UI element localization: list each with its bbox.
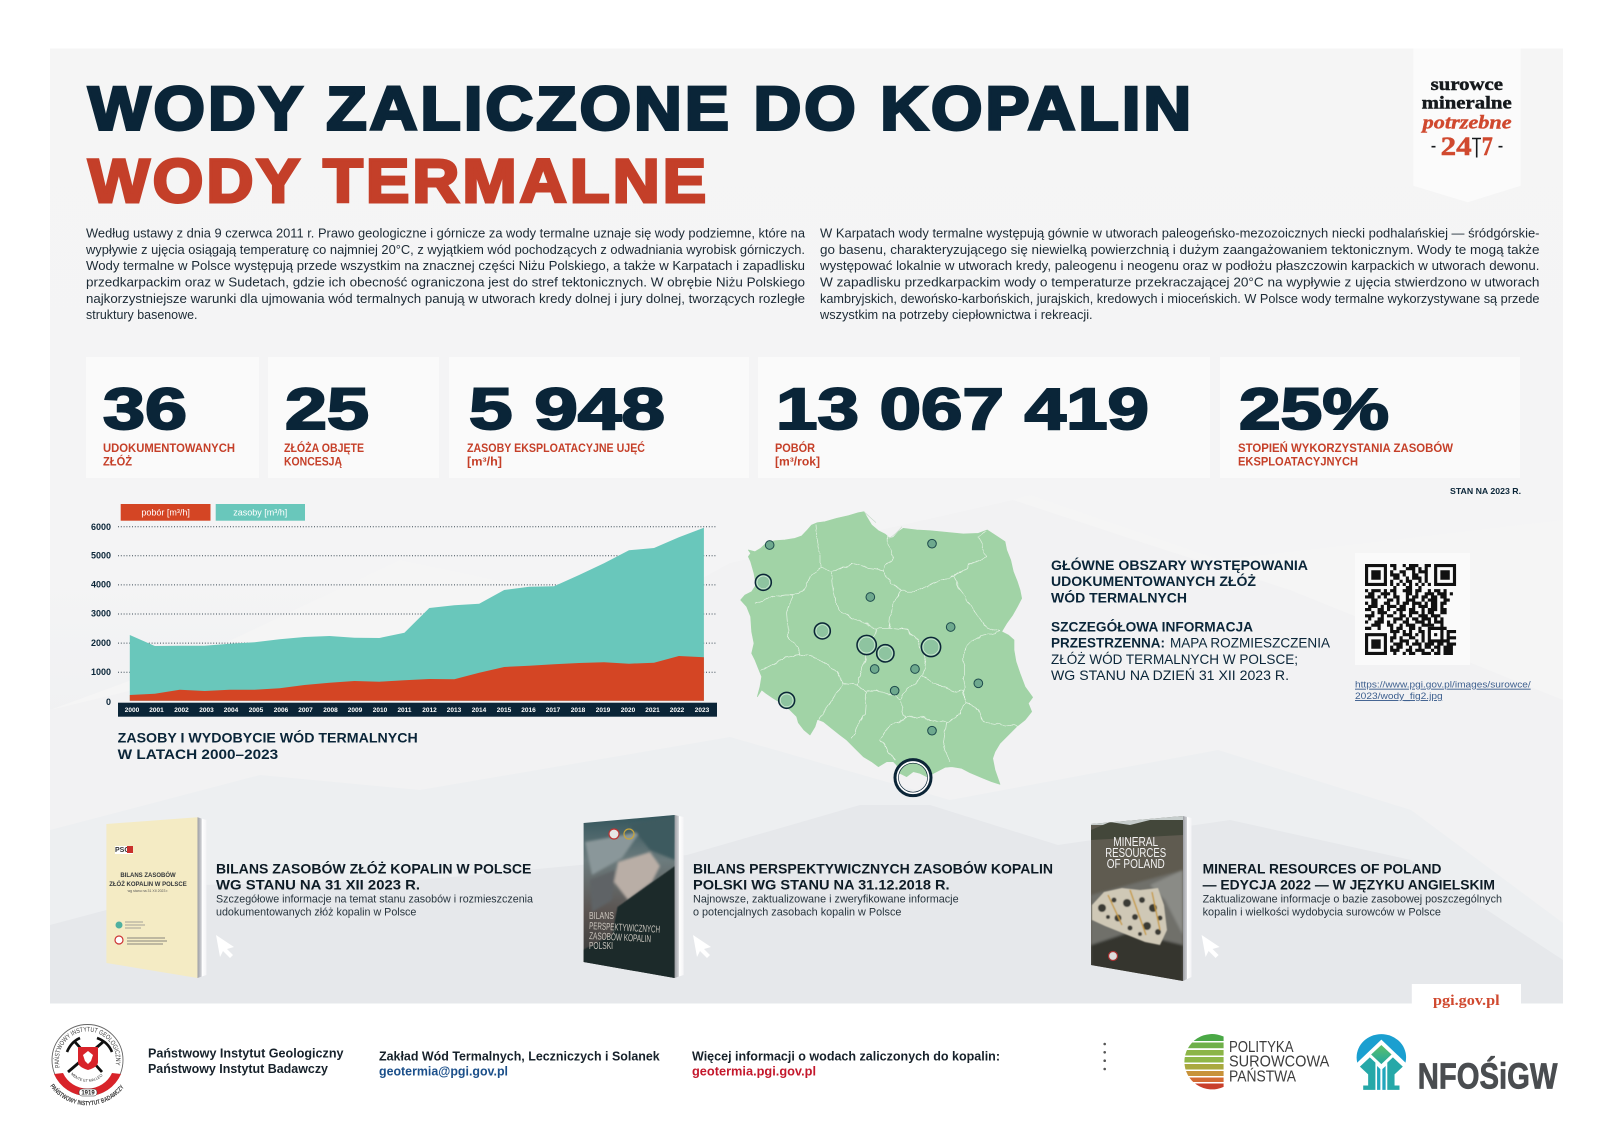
stat card: 25% bbox=[1220, 357, 1520, 478]
map description text: PRZESTRZENNA: bbox=[1051, 635, 1165, 651]
book 3 description: MINERAL RESOURCES OF POLAND bbox=[1203, 860, 1442, 876]
area chart: reserves and extraction 2000–2023: 2012 bbox=[422, 707, 437, 714]
book cover: Bilans perspektywicznych zasobów: POLSKI bbox=[589, 941, 613, 952]
chart title: W LATACH 2000–2023 bbox=[118, 746, 278, 762]
map of Poland with deposit areas bbox=[741, 512, 1033, 796]
area chart: reserves and extraction 2000–2023: 3000 bbox=[91, 608, 111, 618]
book cover: Mineral Resources of Poland: MINERAL bbox=[1113, 834, 1158, 849]
chart title: ZASOBY I WYDOBYCIE WÓD TERMALNYCH bbox=[118, 729, 418, 746]
book cover: Mineral Resources of Poland bbox=[1091, 814, 1192, 985]
stat card: 5 948 bbox=[449, 357, 749, 478]
area chart: reserves and extraction 2000–2023: 2015 bbox=[497, 707, 512, 714]
footer: more information: Więcej informacji o wodach zaliczonych do kopalin: bbox=[692, 1050, 1000, 1064]
area chart: reserves and extraction 2000–2023: 2010 bbox=[373, 707, 388, 714]
badge: surowce mineralne potrzebne 24/7: surowce bbox=[1431, 74, 1503, 94]
stat card: 13 067 419: 13 067 419 bbox=[776, 377, 1149, 442]
title: WODY ZALICZONE DO KOPALIN bbox=[88, 74, 1194, 142]
logo: NFOŚiGW: NFOŚiGW bbox=[1418, 1054, 1557, 1096]
QR link bbox=[1355, 680, 1531, 702]
area chart: reserves and extraction 2000–2023: 5000 bbox=[91, 550, 111, 560]
stat card: 36: 36 bbox=[103, 377, 187, 442]
logo: PGI seal: PAŃSTWOWY INSTYTUT BADAWCZY bbox=[50, 1084, 124, 1106]
badge: surowce mineralne potrzebne 24/7: mineralne bbox=[1422, 92, 1512, 112]
area chart: reserves and extraction 2000–2023: 2009 bbox=[348, 707, 363, 714]
badge: surowce mineralne potrzebne 24/7: 7 bbox=[1482, 132, 1493, 161]
book cover: Bilans perspektywicznych zasobów: BILANS bbox=[589, 911, 614, 922]
area chart: reserves and extraction 2000–2023: 2006 bbox=[274, 707, 289, 714]
area chart: reserves and extraction 2000–2023: 2021 bbox=[645, 707, 660, 714]
QR code bbox=[1355, 553, 1470, 665]
book cover: Bilans perspektywicznych zasobów bbox=[583, 815, 684, 980]
text block: left column: struktury basenowe. bbox=[86, 308, 198, 322]
stat card: 13 067 419: [m³/rok] bbox=[775, 456, 820, 468]
book cover: Bilans zasobów: PSG bbox=[115, 847, 130, 854]
book 1 description: BILANS ZASOBÓW ZŁÓŻ KOPALIN W POLSCE bbox=[216, 859, 531, 876]
area chart: reserves and extraction 2000–2023: 2005 bbox=[249, 707, 264, 714]
badge: surowce mineralne potrzebne 24/7: potrzebne bbox=[1420, 112, 1512, 133]
book 3 description bbox=[1203, 860, 1502, 918]
area chart: reserves and extraction 2000–2023: 4000 bbox=[91, 580, 111, 590]
book 1 description: Szczegółowe informacje na temat stanu zasobów i rozmieszczenia bbox=[216, 894, 534, 906]
map description text: GŁÓWNE OBSZARY WYSTĘPOWANIA bbox=[1051, 556, 1308, 573]
book cover: Mineral Resources of Poland: RESOURCES bbox=[1105, 845, 1166, 860]
footer: institute name: Państwowy Instytut Badawczy bbox=[148, 1062, 328, 1076]
footer: institute name bbox=[148, 1047, 344, 1076]
footer: more information: geotermia.pgi.gov.pl bbox=[692, 1065, 816, 1079]
chart title bbox=[118, 729, 418, 762]
text block: left column: przedkarpackim oraz w Sudetach, gdzie ich obecność ograniczona jest do stref tektonicznych. W obrębie Niżu Polskiego bbox=[86, 276, 805, 290]
book cover: Bilans zasobów bbox=[106, 817, 206, 978]
map description text: ZŁÓŻ WÓD TERMALNYCH W POLSCE; bbox=[1051, 650, 1298, 667]
footer: department contact: Zakład Wód Termalnych, Leczniczych i Solanek bbox=[379, 1050, 660, 1064]
book cover: Bilans perspektywicznych zasobów: ZASOBÓW KOPALIN bbox=[589, 929, 651, 945]
map description text: SZCZEGÓŁOWA INFORMACJA bbox=[1051, 618, 1253, 635]
area chart: reserves and extraction 2000–2023: 2023 bbox=[695, 707, 710, 714]
footer dots bbox=[1103, 1043, 1106, 1070]
logo: PGI seal: 1919 bbox=[81, 1091, 95, 1097]
footer: institute name: Państwowy Instytut Geologiczny bbox=[148, 1047, 344, 1061]
area chart: reserves and extraction 2000–2023: 2008 bbox=[323, 707, 338, 714]
area chart: reserves and extraction 2000–2023: 0 bbox=[106, 697, 111, 707]
chart legend: pobór [m³/h] bbox=[141, 508, 190, 518]
book 2 description: POLSKI WG STANU NA 31.12.2018 R. bbox=[693, 876, 950, 892]
book cover: Bilans zasobów: BILANS ZASOBÓW bbox=[120, 871, 176, 879]
text block: left column: najkorzystniejsze warunki dla ujmowania wód termalnych panują w utworach kredy dolnej i jury dolnej, tworzących rozległe bbox=[86, 292, 805, 306]
book 2 description: Najnowsze, zaktualizowane i zweryfikowane informacje bbox=[693, 894, 959, 906]
stat card: 25%: 25% bbox=[1239, 377, 1389, 442]
title: WODY TERMALNE bbox=[88, 147, 709, 215]
chart legend: zasoby [m³/h] bbox=[233, 508, 287, 518]
map description text: WÓD TERMALNYCH bbox=[1051, 588, 1187, 605]
area chart: reserves and extraction 2000–2023: 2020 bbox=[621, 707, 636, 714]
stat card: 13 067 419: POBÓR bbox=[775, 442, 816, 455]
area chart: reserves and extraction 2000–2023: 2001 bbox=[149, 707, 164, 714]
map description text: WG STANU NA DZIEŃ 31 XII 2023 R. bbox=[1051, 667, 1289, 683]
logo: PGI seal bbox=[50, 1024, 124, 1106]
badge: surowce mineralne potrzebne 24/7 bbox=[1413, 48, 1521, 202]
book 1 description: udokumentowanych złóż kopalin w Polsce bbox=[216, 906, 416, 918]
area chart: reserves and extraction 2000–2023: 2017 bbox=[546, 707, 561, 714]
book 1 description: WG STANU NA 31 XII 2023 R. bbox=[216, 876, 420, 892]
map description text: UDOKUMENTOWANYCH ZŁÓŻ bbox=[1051, 572, 1256, 589]
logo: NFOŚiGW bbox=[1354, 1034, 1557, 1096]
text block: right column: wszystkim na potrzeby ciepłownictwa i rekreacji. bbox=[819, 308, 1093, 322]
logo: PGI seal: PAŃSTWOWY INSTYTUT GEOLOGICZNY bbox=[53, 1026, 121, 1068]
QR link: 2023/wody_fig2.jpg bbox=[1355, 691, 1443, 702]
badge: surowce mineralne potrzebne 24/7: 24 bbox=[1441, 132, 1472, 161]
map description text bbox=[1051, 556, 1331, 683]
title bbox=[88, 74, 1194, 215]
area chart: reserves and extraction 2000–2023: 2004 bbox=[224, 707, 239, 714]
QR link: https://www.pgi.gov.pl/images/surowce/ bbox=[1355, 680, 1531, 691]
book 3 description: Zaktualizowane informacje o bazie zasobowej poszczególnych bbox=[1203, 894, 1502, 906]
icon: cursor bbox=[693, 935, 711, 958]
text block: right column: W zapadlisku przedkarpackim wody o temperaturze przekraczającej 20°C na wypływie z ujęcia stwierdzono w utworach bbox=[820, 276, 1540, 290]
area chart: reserves and extraction 2000–2023: 2018 bbox=[571, 707, 586, 714]
text block: left column: Według ustawy z dnia 9 czerwca 2011 r. Prawo geologiczne i górnicze za wody termalne uznaje się wody podziemne, które na bbox=[86, 227, 805, 241]
stat card: 36: ZŁÓŻ bbox=[103, 456, 132, 468]
stat card: 5 948: 5 948 bbox=[469, 377, 665, 442]
stat card: 13 067 419 bbox=[758, 357, 1210, 478]
text block: right column: go basenu, charakteryzującego się niewielką powierzchnią i dużym zaangażowaniem tektonicznym. Wody te mogą także bbox=[820, 243, 1540, 257]
area chart: reserves and extraction 2000–2023 bbox=[91, 522, 717, 717]
book 2 description: BILANS PERSPEKTYWICZNYCH ZASOBÓW KOPALIN bbox=[693, 859, 1053, 876]
area chart: reserves and extraction 2000–2023: 2019 bbox=[596, 707, 611, 714]
footer: more information bbox=[692, 1050, 1000, 1079]
text block: right column bbox=[819, 227, 1540, 322]
stat card: 25 bbox=[268, 357, 439, 478]
book cover: Bilans zasobów: ZŁÓŻ KOPALIN W POLSCE bbox=[109, 880, 187, 888]
footer: department contact bbox=[379, 1050, 660, 1079]
logo: Polityka Surowcowa Państwa: POLITYKA bbox=[1229, 1039, 1294, 1056]
area chart: reserves and extraction 2000–2023: 2011 bbox=[397, 707, 412, 714]
area chart: reserves and extraction 2000–2023: 2016 bbox=[521, 707, 536, 714]
book 2 description bbox=[693, 859, 1053, 918]
book 3 description: kopalin i wielkości wydobycia surowców w Polsce bbox=[1203, 906, 1441, 918]
stat card: 5 948: ZASOBY EKSPLOATACYJNE UJĘĆ bbox=[467, 442, 645, 455]
text block: left column: Wody termalne w Polsce występują przede wszystkim na znacznej części Niżu Polskiego, a także w Karpatach i zapadlisku bbox=[86, 259, 805, 273]
website tab bbox=[1412, 984, 1521, 1009]
book 1 description bbox=[216, 859, 534, 918]
book cover: Mineral Resources of Poland: OF POLAND bbox=[1107, 856, 1165, 871]
stat card: 36: UDOKUMENTOWANYCH bbox=[103, 443, 235, 455]
text block: left column bbox=[85, 227, 805, 322]
icon: cursor bbox=[216, 935, 234, 958]
stat card: 5 948: [m³/h] bbox=[467, 456, 502, 468]
logo: PGI seal: MENTE ET MALLEO bbox=[71, 1072, 102, 1082]
chart legend bbox=[121, 504, 305, 521]
area chart: reserves and extraction 2000–2023: 1000 bbox=[91, 667, 111, 677]
area chart: reserves and extraction 2000–2023: 2022 bbox=[670, 707, 685, 714]
website tab: pgi.gov.pl bbox=[1433, 993, 1500, 1009]
stat card: 25: KONCESJĄ bbox=[284, 456, 342, 468]
stat card: 25%: STOPIEŃ WYKORZYSTANIA ZASOBÓW bbox=[1238, 442, 1453, 455]
stat card: 25: 25 bbox=[285, 377, 369, 442]
footer: department contact: geotermia@pgi.gov.pl bbox=[379, 1065, 508, 1079]
text block: right column: kambryjskich, dewońsko-karbońskich, jurajskich, kredowych i mioceńskich. W Polsce wody termalne wykorzystywane są przede bbox=[820, 292, 1540, 306]
book cover: Bilans zasobów: wg stanu na 31 XII 2023 r. bbox=[128, 889, 168, 893]
area chart: reserves and extraction 2000–2023: 2003 bbox=[199, 707, 214, 714]
stat card: 36 bbox=[86, 357, 259, 478]
text block: right column: występować lokalnie w utworach kredy, paleogenu i neogenu oraz w podłożu płaszczowin karpackich w utworach dewonu. bbox=[819, 259, 1540, 273]
text block: right column: W Karpatach wody termalne występują gównie w utworach paleogeńsko-mezozoicznych niecki podhalańskiej — śródgórskie- bbox=[820, 227, 1540, 241]
stat card: 25%: EKSPLOATACYJNYCH bbox=[1238, 456, 1358, 468]
background panel bbox=[50, 48, 1563, 1004]
area chart: reserves and extraction 2000–2023: 2000 bbox=[125, 707, 140, 714]
area chart: reserves and extraction 2000–2023: 2002 bbox=[174, 707, 189, 714]
area chart: reserves and extraction 2000–2023: 2014 bbox=[472, 707, 487, 714]
stat card: 25: ZŁÓŻA OBJĘTE bbox=[284, 442, 364, 455]
note: data date: STAN NA 2023 R. bbox=[1450, 486, 1521, 496]
logo: Polityka Surowcowa Państwa: SUROWCOWA bbox=[1229, 1054, 1330, 1071]
logo: Polityka Surowcowa Państwa bbox=[1180, 1033, 1330, 1090]
area chart: reserves and extraction 2000–2023: 2000 bbox=[91, 638, 111, 648]
map description text: MAPA ROZMIESZCZENIA bbox=[1170, 635, 1331, 651]
area chart: reserves and extraction 2000–2023: 2007 bbox=[298, 707, 313, 714]
logo: Polityka Surowcowa Państwa: PAŃSTWA bbox=[1229, 1069, 1297, 1086]
book 3 description: — EDYCJA 2022 — W JĘZYKU ANGIELSKIM bbox=[1203, 876, 1495, 892]
area chart: reserves and extraction 2000–2023: 2013 bbox=[447, 707, 462, 714]
book cover: Bilans perspektywicznych zasobów: PERSPEKTYWICZNYCH bbox=[589, 921, 660, 936]
book 2 description: o potencjalnych zasobach kopalin w Polsce bbox=[693, 906, 901, 918]
icon: cursor bbox=[1202, 935, 1220, 958]
area chart: reserves and extraction 2000–2023: 6000 bbox=[91, 522, 111, 532]
text block: left column: wypływie z ujęcia osiągają temperaturę co najmniej 20°C, z wyjątkiem wód pochodzących z odwadniania wyrobisk górniczych. bbox=[85, 243, 805, 257]
